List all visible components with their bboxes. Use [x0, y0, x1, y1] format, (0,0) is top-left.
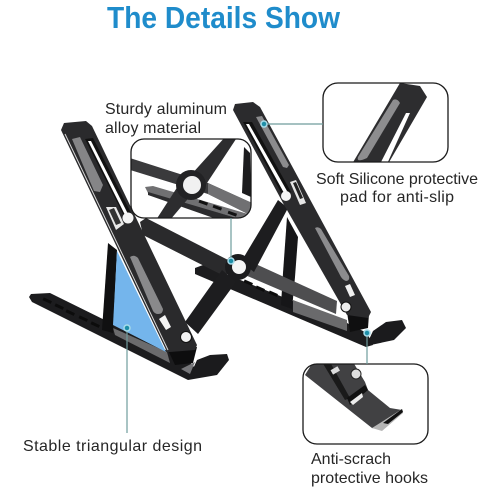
label: triangular design: Stable triangular design: [23, 438, 202, 455]
cross strut: [185, 200, 288, 334]
label: hooks: protective hooks: [311, 470, 428, 487]
rear stand: base: [195, 217, 406, 347]
title: The Details Show: [107, 0, 341, 35]
crossbar: [140, 218, 337, 314]
rear arm: [233, 102, 371, 318]
label: silicone pad: pad for anti-slip: [340, 189, 454, 206]
rear stand: hook: [366, 320, 406, 346]
label: hooks: Anti-scrach: [311, 451, 391, 468]
front arm silicone pads: [72, 137, 103, 192]
front stand: base: [29, 243, 229, 380]
blue triangle panel: [113, 251, 166, 352]
rear arm silicone pads: [256, 116, 289, 168]
label: hooks: [311, 451, 428, 487]
label: aluminum: [105, 101, 227, 137]
front hook: [188, 354, 229, 380]
label: aluminum: alloy material: [105, 120, 201, 137]
black leg: [102, 243, 117, 333]
central pivot: [225, 254, 251, 280]
front arm: [61, 121, 197, 352]
inset: hook detail: [303, 362, 428, 444]
laptop stand illustration: [29, 102, 406, 380]
label: silicone pad: Soft Silicone protective: [316, 171, 478, 188]
inset: silicone pad detail: [323, 83, 448, 164]
label: aluminum: Sturdy aluminum: [105, 101, 227, 118]
label: silicone pad: [316, 171, 478, 206]
callout lines and dots: [124, 121, 370, 433]
inset: pivot detail: [130, 136, 252, 222]
